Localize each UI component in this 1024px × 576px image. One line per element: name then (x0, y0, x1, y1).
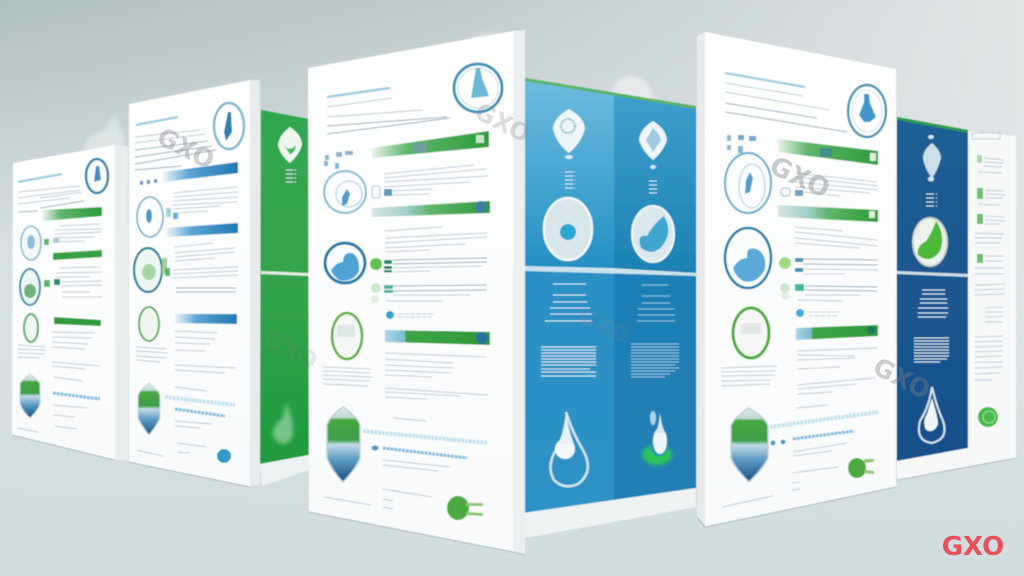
green bar 2 (372, 201, 490, 217)
blue bar 2 (166, 223, 238, 237)
data band (363, 431, 487, 443)
small icons row 2 (371, 283, 393, 303)
green bar 3 (54, 317, 101, 326)
green bar 3 (796, 325, 878, 340)
panel: far left document (12, 145, 128, 460)
icon: top circle (86, 159, 108, 193)
icon: flask circle (137, 179, 163, 237)
green bar (43, 207, 102, 221)
small icons (44, 279, 60, 287)
icon: green oval (139, 307, 159, 341)
panel: blue backing (523, 78, 696, 538)
watermark GXO labels: GXO (574, 303, 633, 349)
icon: circle 3 (134, 248, 170, 292)
icon: green plug (447, 496, 483, 520)
icon: circle 3 (20, 269, 40, 305)
heading box (972, 133, 1000, 139)
small icons row 1 (370, 258, 392, 272)
small icons row 2 (780, 283, 804, 300)
panel: far right document (897, 131, 1016, 480)
text lines (385, 227, 487, 252)
small icons (166, 208, 178, 219)
icon: diamond left (553, 109, 585, 153)
icon: circle 2 (21, 226, 41, 260)
small text (565, 172, 575, 188)
watermark GXO labels: GXO (152, 122, 219, 175)
text lines (795, 227, 878, 248)
watermark GXO labels (152, 97, 935, 405)
heading (327, 88, 390, 97)
heading and intro text (135, 117, 216, 170)
icon: green plug (848, 458, 874, 478)
pill (565, 155, 573, 159)
watermark GXO labels: GXO (470, 97, 535, 148)
watermark GXO labels: GXO (258, 324, 322, 376)
text lines (55, 224, 102, 242)
brand mark GXO: GXO (942, 532, 1004, 562)
panel: second document (129, 80, 260, 487)
icon: water circle (325, 243, 365, 283)
icon: droplet left (550, 412, 588, 486)
icon: shield (20, 374, 40, 418)
icon: shield (327, 407, 360, 482)
icon: green oval (24, 314, 38, 342)
icon: top flask circle (848, 85, 886, 137)
heading and intro text (18, 174, 84, 212)
small blue dot with label (386, 311, 435, 319)
panel: fourth document (697, 32, 896, 527)
blue bar 3 (175, 314, 237, 324)
band text (383, 448, 467, 458)
green bar 1 (778, 139, 878, 165)
small dots (771, 440, 785, 445)
soft smoke decorations (82, 33, 654, 150)
green bar 2 (778, 205, 878, 222)
icon: droplet (919, 387, 945, 443)
icon: big circle right (632, 206, 674, 262)
green bar 3 (385, 330, 490, 345)
text lines (56, 267, 102, 277)
small marks (44, 238, 59, 245)
icon: diamond right (639, 121, 667, 160)
icon: green circle (978, 407, 998, 427)
icon: blue blob (217, 449, 231, 463)
intro text (725, 83, 847, 132)
text lines (385, 353, 487, 377)
icon: big circle left (544, 198, 592, 260)
text lines (795, 173, 878, 196)
icon: diamond (923, 135, 941, 182)
icon: flask circle (725, 135, 771, 213)
heading (725, 73, 805, 87)
green bar 1 (372, 131, 489, 158)
icon: green circle (913, 218, 947, 266)
icon: water circle (725, 228, 771, 288)
watermark GXO labels: GXO (765, 151, 834, 205)
watermark GXO labels: GXO (868, 352, 935, 405)
green bar 2 (53, 250, 102, 260)
icon: shield (138, 383, 160, 435)
data band (770, 412, 878, 427)
panel: dark blue backing (897, 117, 968, 461)
icon: green oval (733, 308, 769, 358)
icon: diamond (278, 127, 302, 163)
icon: flask circle (324, 151, 366, 213)
text lines (384, 165, 488, 195)
small blue dot with label (796, 309, 840, 317)
icon: top circle (214, 103, 244, 149)
band text (793, 431, 854, 439)
green icons (977, 155, 983, 263)
icon: top flask circle (454, 64, 502, 112)
white text blocks (914, 290, 949, 362)
text lines (173, 187, 238, 213)
small icons row 1 (779, 257, 803, 272)
icon: shield (731, 408, 768, 482)
small icons (781, 188, 803, 196)
icon: droplet right with green glow (642, 411, 672, 465)
icon: cloud (372, 446, 378, 450)
intro text (327, 98, 450, 134)
text lines (975, 158, 1006, 380)
panel: main document (308, 30, 525, 555)
icon: droplet (273, 402, 293, 444)
icon: green oval (332, 313, 362, 359)
text lines (797, 348, 877, 408)
white text blocks (541, 284, 596, 376)
panel: green backing (260, 110, 309, 486)
small icons (372, 186, 392, 198)
blue bar (163, 162, 238, 182)
